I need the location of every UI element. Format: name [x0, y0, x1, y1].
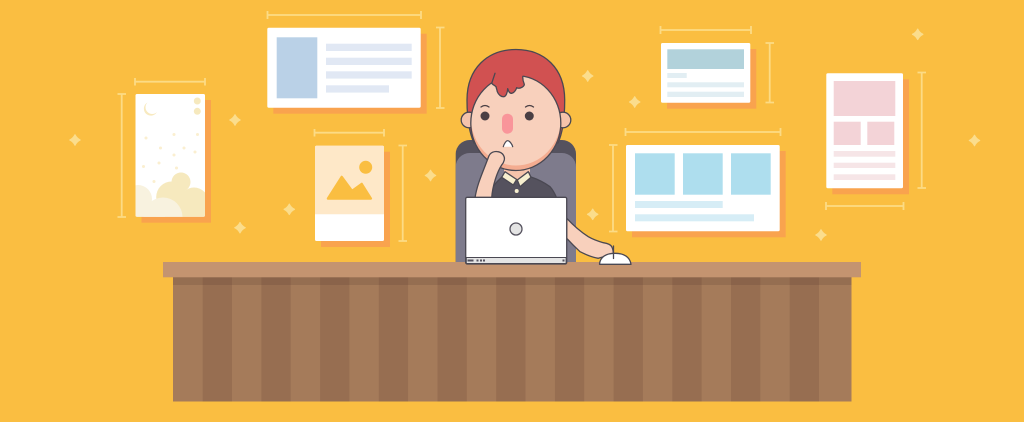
laptop toolbar: [466, 258, 566, 264]
arm reaching to mouse: [567, 218, 613, 258]
text lines: [834, 151, 895, 180]
dimension: banner card height: [766, 43, 774, 102]
hair back: [467, 50, 565, 143]
panel: phone layout card: [136, 94, 211, 223]
nose: [502, 114, 513, 134]
ears: [461, 112, 571, 128]
desk body: [173, 277, 852, 402]
text lines: [326, 44, 412, 93]
image area: [315, 146, 384, 214]
dimension: image card width: [314, 129, 384, 136]
thumbnail: [277, 37, 317, 98]
desk top: [163, 262, 861, 277]
face shading: [471, 76, 561, 170]
dimension: phone card height: [118, 94, 126, 217]
desk top shadow: [173, 277, 852, 285]
columns: [635, 153, 771, 195]
desk stripes: [203, 277, 819, 402]
hero and thumbnails: [834, 81, 895, 145]
laptop: [466, 197, 567, 264]
text lines: [667, 73, 744, 97]
dimension: three column card height: [609, 145, 618, 232]
dimension: article card width: [826, 202, 904, 210]
dimension: phone card width: [135, 78, 205, 86]
desk: [163, 262, 861, 402]
panel: list layout card: [267, 28, 427, 114]
face highlight: [471, 70, 561, 166]
stars: [142, 133, 199, 183]
sparkles: [70, 29, 980, 240]
dimension: image card height: [398, 146, 407, 241]
hair fringe: [492, 70, 524, 97]
mouse: [600, 246, 631, 264]
chair: [456, 140, 576, 265]
icon: mountains: [328, 177, 371, 198]
character: [461, 50, 613, 258]
dimension: list card height: [436, 28, 444, 108]
dimension: article card height: [918, 72, 926, 188]
dots: page indicators: [194, 98, 201, 115]
neck: [504, 166, 530, 181]
panel: banner layout card: [661, 43, 756, 109]
face: [471, 70, 561, 170]
eyebrows: [481, 106, 534, 107]
dimension: banner card width: [660, 26, 751, 34]
arm raised to chin: [475, 152, 504, 198]
icon: moon: [144, 102, 157, 116]
eyes: [480, 112, 534, 120]
dimension: three column card width: [626, 128, 780, 136]
panel: image layout card: [315, 146, 390, 247]
banner image: [667, 49, 744, 69]
clouds: [136, 172, 205, 217]
shirt: [492, 177, 557, 198]
collar: [502, 172, 531, 187]
icon: sun: [359, 161, 372, 174]
face outline: [471, 76, 561, 170]
dimension: list card width: [268, 11, 421, 19]
panel: article layout card: [826, 73, 909, 194]
shirt button: [515, 189, 519, 193]
panel: three column layout card: [626, 145, 786, 237]
text lines: [635, 201, 754, 221]
mouth: [503, 141, 513, 147]
toolbar controls: [468, 260, 564, 262]
laptop logo: [510, 223, 522, 235]
